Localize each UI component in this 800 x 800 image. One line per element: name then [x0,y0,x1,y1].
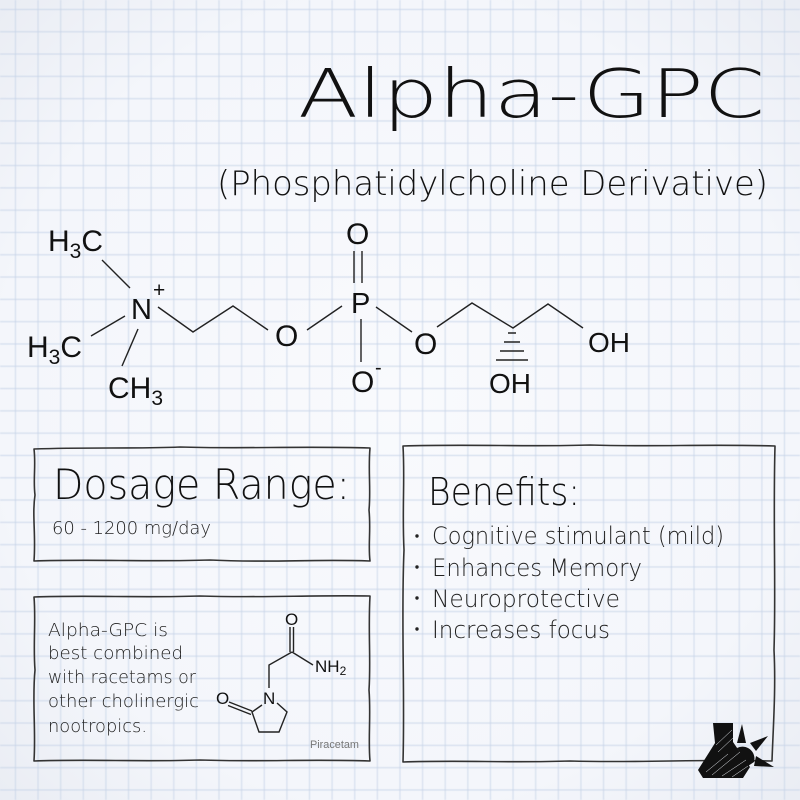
molecule atom labels: 3 [70,240,81,263]
chemical structure: Piracetam: O [285,610,298,629]
chemical structure: Piracetam: NH [315,657,340,676]
note text [48,620,199,737]
chemical structure: Piracetam: O [216,689,229,708]
dosage value: 60 - 1200 mg/day [52,518,211,539]
molecule atom labels: OH [588,327,630,358]
molecule atom labels: 3 [151,387,163,410]
heading: Dosage Range: [53,460,350,509]
molecule atom labels: H [27,331,49,364]
note text: with racetams or [48,667,197,688]
panel: benefits [403,445,775,762]
molecule atom labels [27,218,630,410]
benefits list [415,522,724,644]
chemical structure: Alpha-GPC [27,218,630,410]
title: Alpha-GPC [298,55,765,133]
molecule atom labels: CH [108,372,151,405]
panel: dosage range [34,447,370,561]
molecule atom labels: P [351,288,370,320]
molecule atom labels: C [60,331,82,364]
panel outline [34,596,370,761]
note text: other cholinergic [48,691,199,712]
panel outline [403,445,775,762]
molecule atom labels: OH [489,368,531,399]
note text: best combined [48,643,183,664]
molecule atom labels: H [48,225,70,258]
molecule bonds [91,251,583,366]
molecule atom labels: - [375,357,382,379]
panel: combination note [34,596,370,761]
molecule atom labels: O [275,320,298,353]
molecule atom labels: O [414,328,437,361]
molecule atom labels: O [346,218,369,251]
icon: flask and sun logo [698,723,774,778]
benefits list: Increases focus [432,616,610,644]
panel outline [34,447,370,561]
heading: Benefits: [428,470,580,514]
molecule atom labels: 3 [49,346,60,369]
subtitle: (Phosphatidylcholine Derivative) [217,164,768,204]
benefits list: Cognitive stimulant (mild) [432,522,724,550]
molecule atom labels: C [81,225,103,258]
chemical structure: Piracetam: N [263,689,275,708]
chemical structure: Piracetam: 2 [340,664,347,678]
molecule atom labels: O [351,366,374,399]
benefits list: Neuroprotective [432,585,620,613]
molecule atom labels: + [153,279,165,302]
molecule atom labels: N [131,294,152,326]
note text: Alpha-GPC is [48,620,168,641]
caption: Piracetam: Piracetam [310,739,359,751]
note text: nootropics. [48,716,147,737]
benefits list: Enhances Memory [432,554,642,582]
chemical structure: Piracetam [216,610,347,732]
